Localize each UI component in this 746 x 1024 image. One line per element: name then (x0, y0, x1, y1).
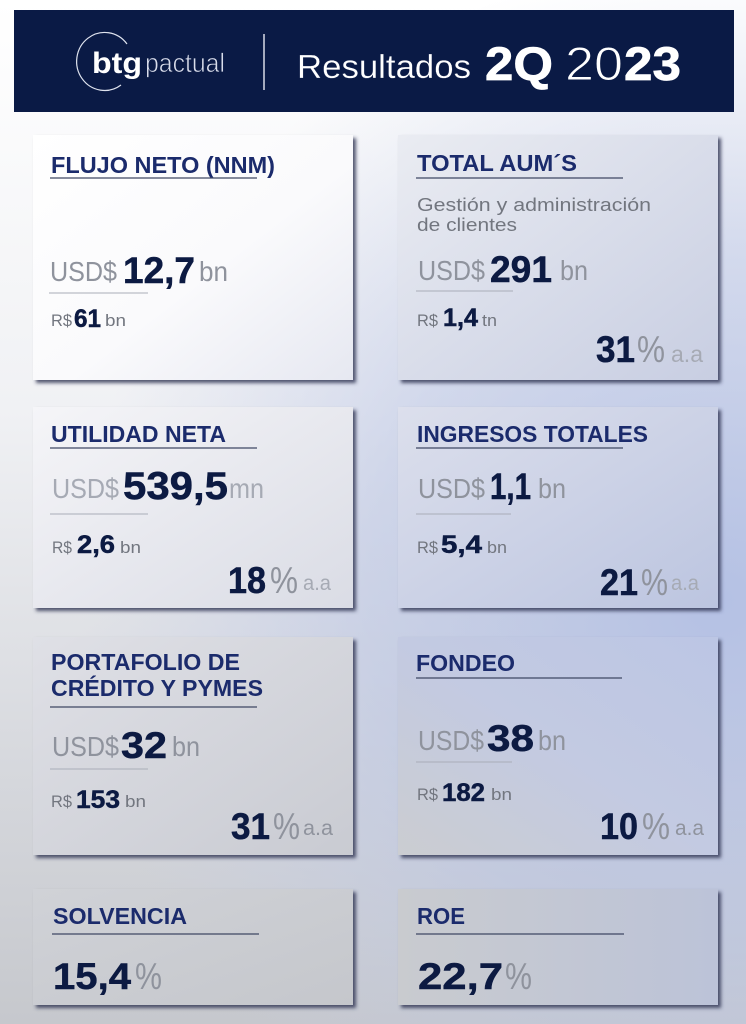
growth: 31% a.a (596, 329, 703, 370)
metric: 15,4%: 15,4 (53, 956, 131, 997)
metric: USD 38 bn: USD$ (418, 725, 484, 756)
metric: R$ 182 bn: bn (491, 785, 512, 804)
metric: R$ 61 bn: R$ (51, 311, 73, 330)
metric: USD 539,5 mn: mn (229, 473, 264, 504)
metric: USD 539,5 mn (52, 465, 264, 508)
metric: R$ 1,4 tn (417, 304, 497, 332)
metric: USD 539,5 mn: USD$ (52, 473, 119, 504)
metric: USD 12,7 bn: 12,7 (123, 250, 195, 291)
heading: portafolio: CRÉDITO Y PYMES (51, 674, 263, 701)
header title: 23 (624, 37, 681, 90)
heading: roe: ROE (417, 903, 465, 929)
panel: portafolio (33, 637, 353, 855)
metric: USD 291 bn (418, 249, 588, 290)
growth: 31% a.a: 31 (231, 806, 270, 847)
metric: USD 12,7 bn: USD$ (50, 256, 117, 287)
metric: USD 32 bn: USD$ (52, 731, 119, 762)
metric: USD 1,1 bn: USD$ (418, 473, 485, 504)
growth: 21% a.a: % (641, 562, 668, 603)
metric: R$ 2,6 bn (52, 531, 141, 559)
heading: solvencia: SOLVENCIA (53, 903, 187, 929)
heading: fondeo: FONDEO (416, 650, 515, 676)
growth: 31% a.a: % (273, 806, 300, 847)
metric: USD 32 bn (52, 725, 200, 766)
metric: R$ 2,6 bn: 2,6 (77, 531, 115, 559)
metric: R$ 1,4 tn: 1,4 (443, 304, 478, 332)
growth: 21% a.a (600, 562, 699, 603)
header divider (263, 34, 265, 90)
metric: R$ 5,4 bn: 5,4 (441, 531, 482, 559)
metric: USD 38 bn: bn (538, 725, 566, 756)
logo: btg pactual (77, 32, 225, 90)
metric: 15,4% (53, 956, 162, 997)
metric: R$ 61 bn: 61 (74, 305, 101, 333)
panel: fondeo (398, 637, 718, 855)
metric: R$ 5,4 bn (417, 531, 507, 559)
description: Gestión y administración (417, 194, 651, 215)
header title: Resultados (297, 48, 471, 85)
description (417, 194, 651, 235)
growth: 18% a.a: 18 (228, 560, 266, 601)
metric: R$ 61 bn: bn (105, 311, 126, 330)
logo: btg pactual: btg (92, 47, 142, 80)
metric: USD 38 bn: 38 (487, 718, 534, 759)
panel: solvencia (33, 889, 353, 1005)
heading: portafolio: PORTAFOLIO DE (51, 649, 240, 675)
metric: USD 12,7 bn: bn (199, 256, 228, 287)
panel: utilidad neta (33, 407, 353, 608)
metric: R$ 5,4 bn: bn (487, 538, 507, 557)
growth: 18% a.a: % (270, 560, 298, 601)
metric: R$ 182 bn: 182 (442, 779, 485, 807)
metric: R$ 153 bn: R$ (51, 792, 73, 811)
metric: R$ 2,6 bn: R$ (52, 538, 72, 557)
header banner (14, 10, 734, 112)
growth: 21% a.a: 21 (600, 562, 638, 603)
heading: utilidad neta: UTILIDAD NETA (51, 421, 226, 447)
growth: 10% a.a: % (642, 806, 670, 847)
heading: total aums: TOTAL AUM´S (417, 150, 577, 176)
growth: 31% a.a: % (637, 329, 665, 370)
growth: 10% a.a: a.a (675, 817, 704, 840)
description: de clientes (417, 214, 517, 235)
metric: R$ 1,4 tn: tn (482, 311, 497, 330)
header title (297, 37, 681, 90)
metric: USD 291 bn: USD$ (418, 255, 485, 286)
metric: 22,7%: % (505, 956, 532, 997)
metric: USD 291 bn: 291 (490, 249, 552, 290)
heading: portafolio (51, 649, 263, 701)
panel: flujo neto (33, 135, 353, 380)
logo: btg pactual: pactual (145, 48, 225, 78)
metric: R$ 61 bn (51, 305, 126, 333)
growth: 31% a.a: a.a (303, 817, 333, 840)
metric: R$ 153 bn: bn (125, 792, 146, 811)
metric: USD 32 bn: 32 (121, 725, 167, 766)
panel: ingresos totales (398, 407, 718, 608)
metric: R$ 182 bn: R$ (417, 785, 439, 804)
growth: 10% a.a: 10 (600, 806, 638, 847)
metric: R$ 153 bn: 153 (76, 786, 120, 814)
header title: 20 (565, 37, 623, 90)
metric: USD 1,1 bn: bn (538, 473, 566, 504)
growth: 31% a.a: a.a (671, 341, 703, 367)
growth: 10% a.a (600, 806, 704, 847)
header title: 2Q (485, 37, 553, 90)
metric: R$ 5,4 bn: R$ (417, 538, 439, 557)
growth: 31% a.a (231, 806, 333, 847)
metric: USD 1,1 bn: 1,1 (490, 466, 531, 507)
metric: R$ 1,4 tn: R$ (417, 311, 439, 330)
metric: 22,7% (418, 956, 532, 997)
metric: USD 1,1 bn (418, 466, 566, 507)
growth: 21% a.a: a.a (671, 572, 699, 595)
heading: ingresos totales: INGRESOS TOTALES (417, 421, 648, 447)
metric: 22,7%: 22,7 (418, 956, 503, 997)
growth: 31% a.a: 31 (596, 329, 635, 370)
growth: 18% a.a (228, 560, 331, 601)
metric: R$ 182 bn (417, 779, 512, 807)
growth: 18% a.a: a.a (303, 572, 331, 595)
metric: USD 291 bn: bn (560, 255, 588, 286)
metric: USD 38 bn (418, 718, 566, 759)
panel: total aums (398, 135, 718, 380)
metric: USD 12,7 bn (50, 250, 228, 291)
metric: R$ 153 bn (51, 786, 146, 814)
metric: R$ 2,6 bn: bn (120, 538, 141, 557)
heading: flujo neto: FLUJO NETO (NNM) (51, 152, 275, 178)
metric: USD 32 bn: bn (172, 731, 200, 762)
metric: 15,4%: % (135, 956, 162, 997)
metric: USD 539,5 mn: 539,5 (123, 465, 228, 508)
panel: roe (398, 889, 718, 1005)
